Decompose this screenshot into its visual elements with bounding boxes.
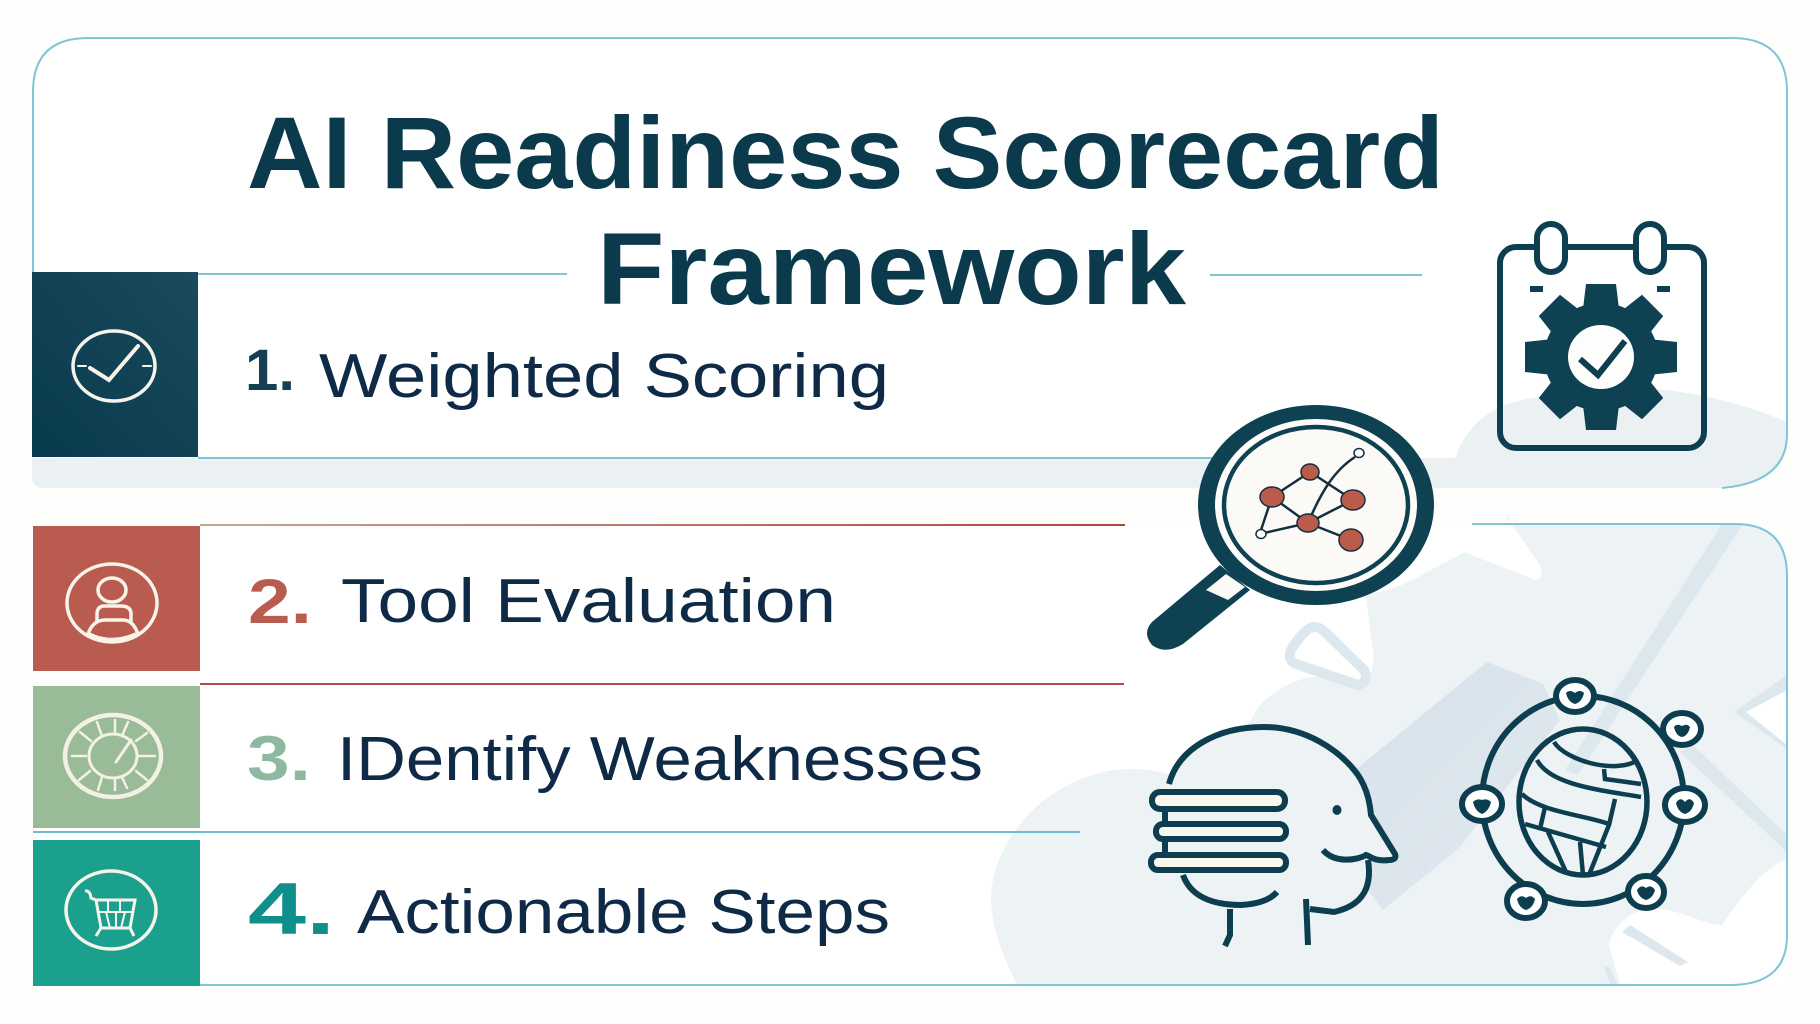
row 4: Actionable Steps (33, 840, 890, 986)
icon: gauge (65, 715, 161, 797)
row 1: Weighted Scoring: 1. (245, 338, 295, 403)
row 2: Tool Evaluation (33, 525, 1125, 684)
row 1: Weighted Scoring (32, 272, 889, 457)
icon: check circle (73, 331, 155, 401)
title side rules (198, 274, 1422, 458)
row 1: Weighted Scoring: Weighted Scoring (319, 342, 889, 411)
row 3: Identify Weaknesses (33, 686, 1080, 832)
row 3: Identify Weaknesses: IDentify Weaknesses (337, 725, 983, 794)
row 2: Tool Evaluation: 2. (248, 567, 312, 637)
icon: brain ring network (1462, 680, 1705, 918)
icon: shopping cart (66, 871, 156, 949)
row 2: Tool Evaluation: Tool Evaluation (341, 567, 836, 636)
title: Framework (597, 212, 1186, 326)
row 3: Identify Weaknesses: 3. (247, 724, 311, 794)
icon: person (67, 564, 157, 642)
icon: head with books (1151, 727, 1395, 946)
row 4: Actionable Steps: 4. (248, 869, 335, 950)
title: AI Readiness Scorecard (247, 96, 1444, 210)
panel: top card (32, 38, 1787, 488)
icon: calendar with gear (1500, 224, 1704, 448)
title (247, 96, 1444, 326)
row 4: Actionable Steps: Actionable Steps (357, 878, 890, 947)
icon: magnifying glass with network (1147, 405, 1434, 650)
panel: lower card background (200, 515, 1787, 985)
